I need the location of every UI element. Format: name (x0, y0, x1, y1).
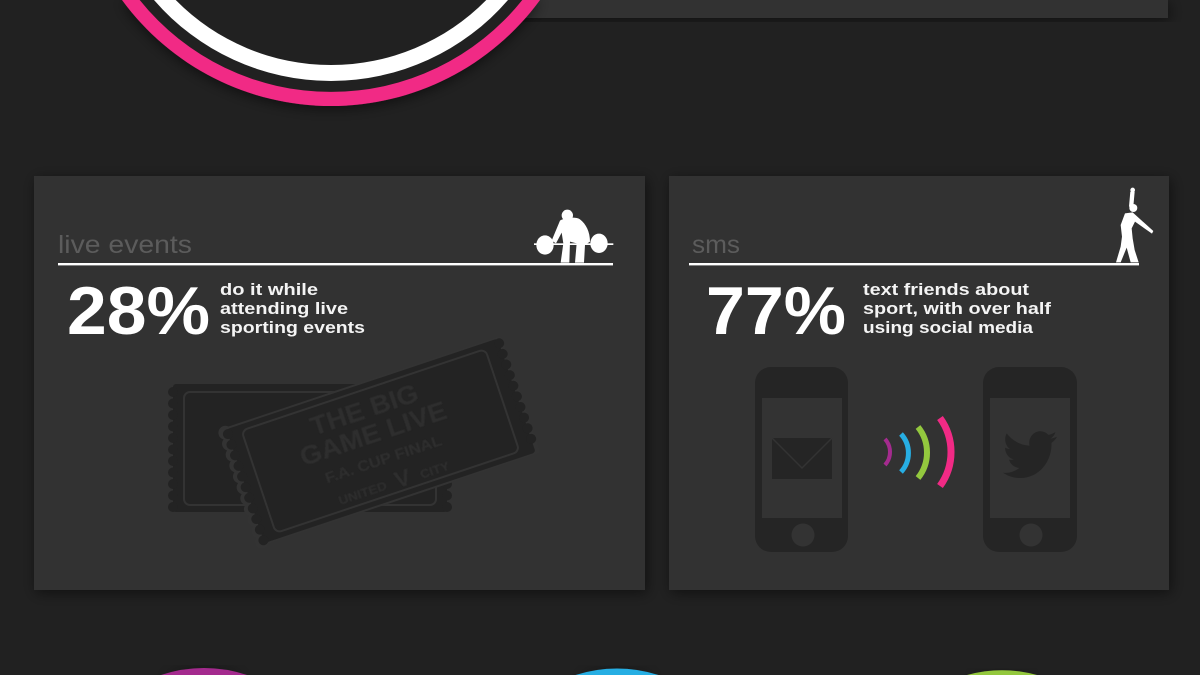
top panel (cropped) (500, 0, 1168, 18)
panel: live events (34, 176, 645, 590)
heading: live events: live events (58, 231, 192, 259)
stat description: do it while (220, 280, 318, 299)
ticket text (296, 377, 451, 508)
back ticket (173, 384, 447, 512)
bottom circle: green (967, 670, 1037, 675)
illustration: phone with twitter bird (983, 367, 1077, 552)
ticket text: THE BIG (306, 377, 422, 441)
heading rule (58, 263, 613, 265)
icon: gymnast (1116, 188, 1153, 262)
stat: 77%: 77% (706, 273, 846, 349)
bottom circle: purple (161, 668, 247, 675)
heading rule (689, 263, 1139, 265)
stat description (863, 280, 1051, 337)
stat description: text friends about (863, 280, 1029, 299)
bottom circle: blue (576, 668, 658, 675)
stat: 28%: 28% (67, 273, 210, 349)
top circle with pink and white rings (122, 0, 540, 106)
illustration: tickets (173, 335, 541, 547)
stat description: using social media (863, 318, 1034, 337)
illustration: phone with envelope (755, 367, 848, 552)
ticket text: UNITED (337, 479, 389, 508)
stat description: sport, with over half (863, 299, 1051, 318)
signal arcs (885, 418, 951, 486)
ticket text: CITY (418, 459, 451, 482)
front ticket (220, 335, 541, 547)
icon: envelope (772, 438, 832, 479)
icon: weightlifter (534, 210, 613, 263)
icon: twitter bird (1003, 431, 1057, 478)
heading: sms: sms (692, 231, 740, 259)
ticket text: GAME LIVE (296, 395, 450, 472)
stat description: attending live (220, 299, 348, 318)
stat description: sporting events (220, 318, 365, 337)
panel: sms (669, 176, 1169, 590)
stat description (220, 280, 365, 337)
ticket text: V (391, 463, 414, 493)
ticket text: F.A. CUP FINAL (323, 432, 444, 487)
